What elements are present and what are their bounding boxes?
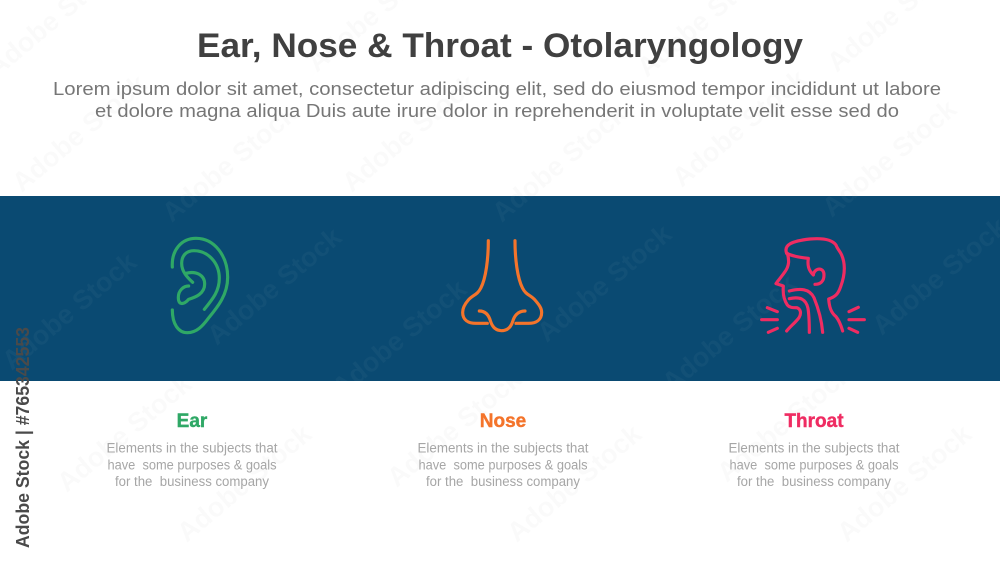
text block: ear: for the business company	[115, 474, 269, 489]
text block: nose	[418, 440, 589, 489]
intro paragraph	[53, 78, 941, 121]
text block: nose: Elements in the subjects that	[418, 440, 589, 456]
dark blue band	[0, 196, 1000, 381]
text block: nose: have some purposes & goals	[418, 458, 588, 472]
stock id text: Adobe Stock | #765342553	[13, 327, 33, 548]
intro paragraph: et dolore magna aliqua Duis aute irure dolor in reprehenderit in voluptate velit esse sed do	[95, 100, 899, 121]
icon: ear	[172, 238, 228, 333]
icon: nose	[463, 241, 542, 331]
column: ear	[106, 411, 278, 489]
text block: ear: Elements in the subjects that	[106, 440, 278, 456]
watermark pattern on band: Adobe Stock	[531, 218, 678, 348]
watermark pattern on band	[0, 93, 1000, 403]
watermark pattern on white background: Adobe Stock	[6, 68, 153, 198]
watermark pattern on band: Adobe Stock	[816, 93, 963, 223]
watermark pattern on white background: Adobe Stock	[171, 418, 318, 548]
watermark pattern on band: Adobe Stock	[656, 268, 803, 398]
watermark pattern on white background: Adobe Stock	[501, 418, 648, 548]
text block: ear: have some purposes & goals	[108, 458, 277, 472]
watermark pattern on white background: Adobe Stock	[831, 418, 978, 548]
text block: throat: Elements in the subjects that	[728, 440, 900, 456]
text block: throat: for the business company	[737, 474, 891, 489]
watermark pattern on white background: Adobe Stock	[486, 98, 633, 228]
watermark pattern on white background: Adobe Stock	[336, 68, 483, 198]
watermark pattern on band: Adobe Stock	[201, 221, 348, 351]
column: nose	[418, 411, 589, 489]
watermark pattern on band: Adobe Stock	[0, 246, 143, 376]
heading: nose: Nose	[480, 411, 526, 432]
watermark pattern on white background: Adobe Stock	[666, 63, 813, 193]
column: throat	[728, 411, 900, 489]
watermark pattern on band: Adobe Stock	[486, 98, 633, 228]
icon: throat	[762, 239, 864, 332]
heading: ear: Ear	[177, 411, 208, 432]
watermark pattern on white background: Adobe Stock	[381, 363, 528, 493]
watermark pattern on band: Adobe Stock	[156, 98, 303, 228]
text block: throat	[728, 440, 900, 489]
watermark pattern on white background: Adobe Stock	[51, 368, 198, 498]
watermark pattern on band: Adobe Stock	[326, 273, 473, 403]
title: Ear, Nose & Throat - Otolaryngology	[197, 27, 803, 65]
watermark pattern on white background: Adobe Stock	[156, 98, 303, 228]
watermark pattern on white background: Adobe Stock	[711, 358, 858, 488]
text block: throat: have some purposes & goals	[730, 458, 899, 472]
text block: nose: for the business company	[426, 474, 580, 489]
intro paragraph: Lorem ipsum dolor sit amet, consectetur adipiscing elit, sed do eiusmod tempor incididunt ut labore	[53, 78, 941, 99]
heading: throat: Throat	[784, 411, 844, 432]
text block: ear	[106, 440, 278, 489]
watermark pattern on white background: Adobe Stock	[816, 93, 963, 223]
